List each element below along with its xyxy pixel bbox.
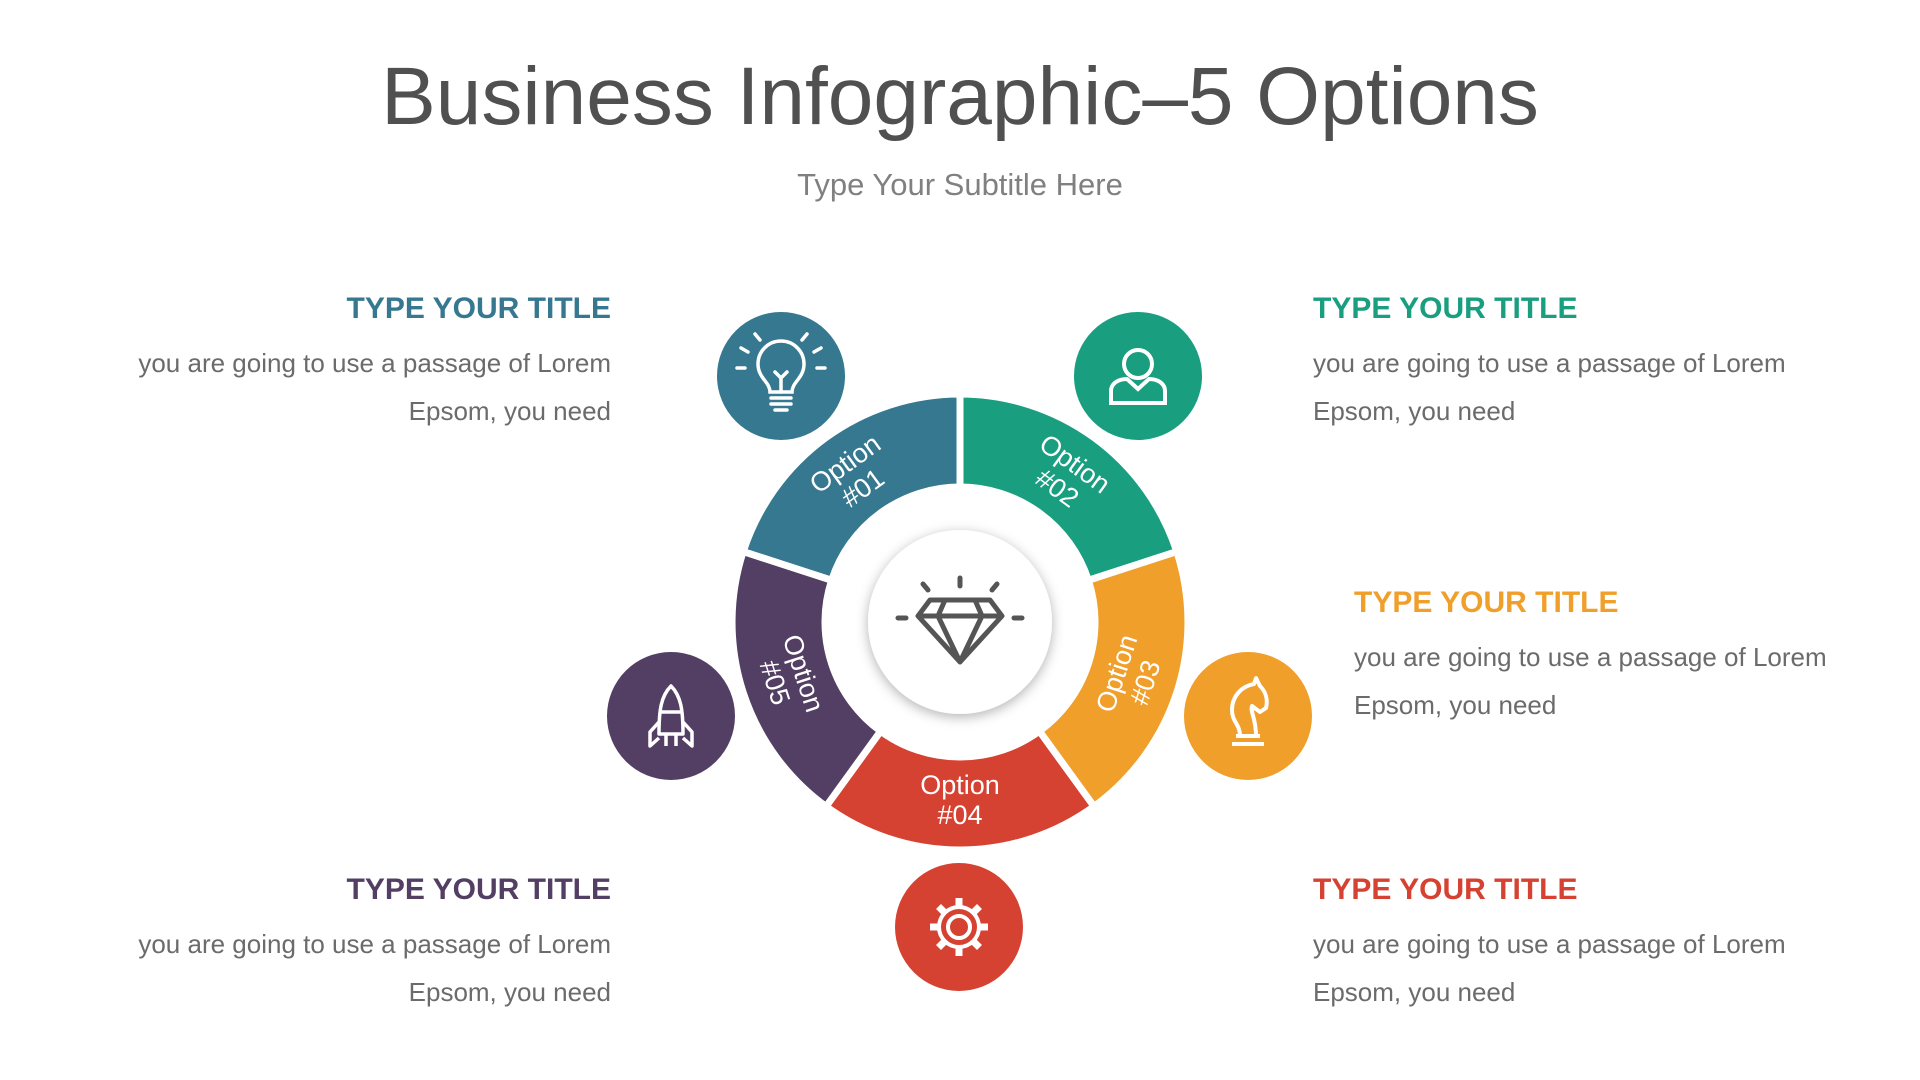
center circle with diamond icon [868,530,1052,714]
segment 2: #02 [1030,463,1084,514]
text block: option 5: TYPE YOUR TITLE [347,873,611,906]
text block: option 2: TYPE YOUR TITLE [1313,292,1577,325]
icon: person (option 2) [1074,312,1202,440]
segment 2: Option [1034,428,1116,499]
text block: option 4: you are going to use a passage of Lorem [1313,929,1786,959]
text block: option 5: you are going to use a passage of Lorem [138,929,611,959]
segment 3: #03 [1124,657,1166,709]
segment 1: Option [804,428,886,499]
segment 4 [826,731,1094,850]
text block: option 5 [138,873,611,1007]
segment 5: Option [777,631,830,716]
text block: option 1: you are going to use a passage of Lorem [138,348,611,378]
segment 3 [1039,552,1188,806]
text block: option 1: Epsom, you need [409,396,611,426]
segment 3: Option [1090,631,1143,716]
title: Business Infographic–5 Options [381,51,1539,142]
text block: option 3: TYPE YOUR TITLE [1354,586,1618,619]
text block: option 2: Epsom, you need [1313,396,1515,426]
text block: option 2 [1313,292,1786,426]
text block: option 3 [1354,586,1827,720]
segment 4: Option [920,770,1000,800]
text block: option 3: you are going to use a passage of Lorem [1354,642,1827,672]
subtitle: Type Your Subtitle Here [797,167,1123,202]
text block: option 3: Epsom, you need [1354,690,1556,720]
text block: option 1 [138,292,611,426]
text block: option 4: TYPE YOUR TITLE [1313,873,1577,906]
text block: option 4: Epsom, you need [1313,977,1515,1007]
icon: lightbulb (option 1) [717,312,845,440]
text block: option 4 [1313,873,1786,1007]
segment 1: #01 [836,463,890,514]
text block: option 2: you are going to use a passage of Lorem [1313,348,1786,378]
segment 2 [960,394,1177,580]
icon: chess knight (option 3) [1184,652,1312,780]
segment 5: #05 [754,657,796,709]
segment 1 [743,394,960,580]
segment 5 [732,552,881,806]
icon: rocket (option 5) [607,652,735,780]
text block: option 1: TYPE YOUR TITLE [347,292,611,325]
text block: option 5: Epsom, you need [409,977,611,1007]
segment 4: #04 [937,800,983,830]
icon: gear (option 4) [895,863,1023,991]
